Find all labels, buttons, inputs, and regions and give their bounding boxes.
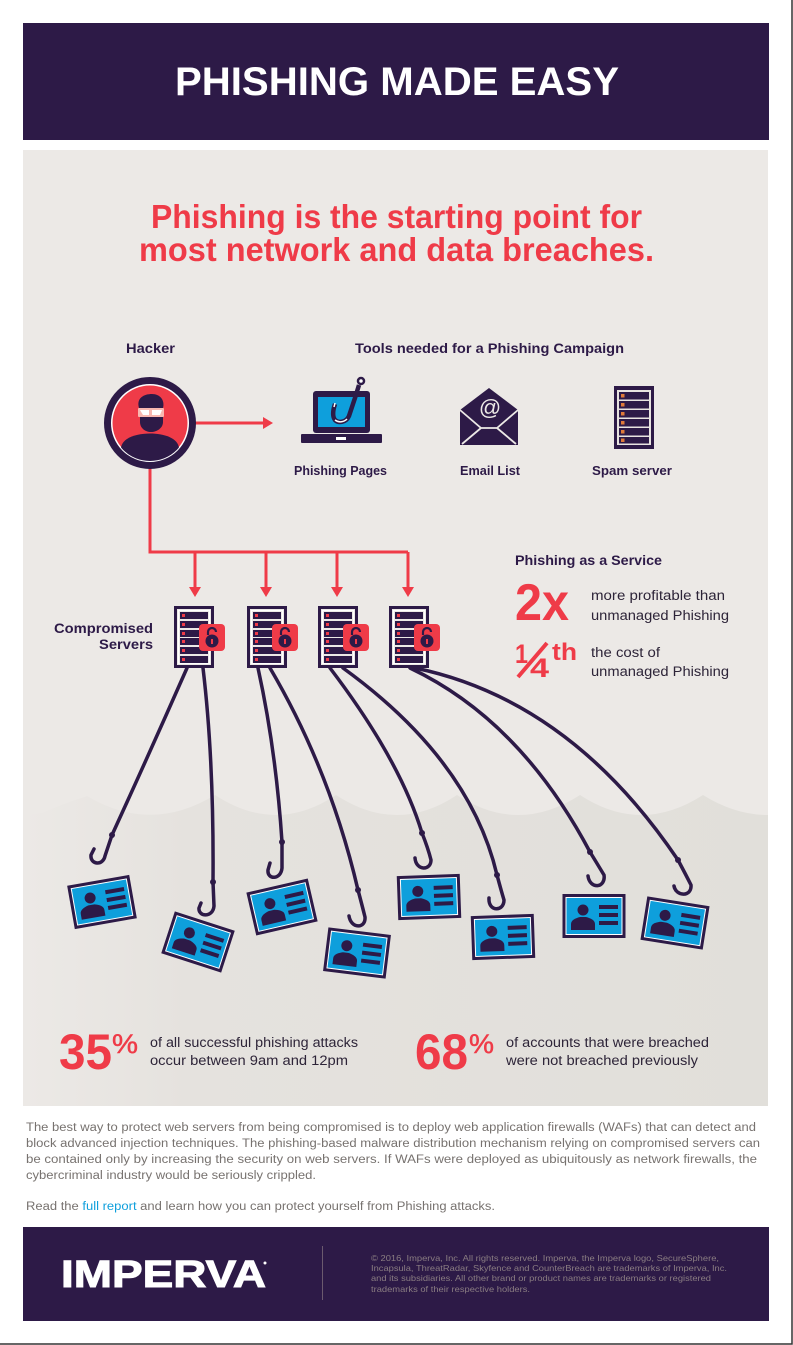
stat: quarter cost: 1 <box>515 639 528 669</box>
arrowheads <box>189 417 414 597</box>
headline: Phishing is the starting point for <box>151 198 642 235</box>
stat: 35 percent: of all successful phishing attacks <box>150 1035 358 1050</box>
icon: hacker <box>108 380 192 466</box>
legal text: Incapsula, ThreatRadar, Skyfence and CounterBreach are trademarks of Imperva, Inc. <box>371 1263 727 1273</box>
stat: 2x: unmanaged Phishing <box>591 608 729 623</box>
label: spam server: Spam server <box>592 464 672 478</box>
label: compromised servers: Compromised <box>54 621 153 636</box>
stat: 2x: 2x <box>515 574 569 632</box>
stat: quarter cost <box>515 639 729 683</box>
body paragraph <box>26 1122 760 1182</box>
main panel background <box>23 150 768 1106</box>
footer divider <box>322 1246 323 1300</box>
phishing as a service heading: Phishing as a Service <box>515 553 663 568</box>
stat: quarter cost: 4 <box>530 653 549 683</box>
legal text: and its subsidiaries. All other brand or product names are trademarks or registered <box>371 1273 711 1283</box>
footer banner <box>23 1227 769 1321</box>
hook knots <box>109 830 681 893</box>
headline: most network and data breaches. <box>139 231 654 268</box>
stat: quarter cost: unmanaged Phishing <box>591 664 729 679</box>
stat: 68 percent: of accounts that were breached <box>506 1035 709 1050</box>
icon: spam server <box>614 386 654 449</box>
red connector lines from hacker to servers <box>150 423 408 587</box>
legal text <box>371 1253 727 1294</box>
stat: 2x <box>515 574 729 632</box>
stat: 68 percent <box>415 1024 709 1080</box>
icon: laptop with hook <box>301 378 382 443</box>
label: compromised servers <box>54 621 153 652</box>
body paragraph: be contained only by increasing the security on web servers. If WAFs were deployed as ubiquitously as network firewalls, the <box>26 1154 757 1166</box>
stat: 35 percent: occur between 9am and 12pm <box>150 1053 348 1068</box>
fishing lines and hooks <box>91 668 691 926</box>
headline <box>139 198 654 268</box>
logo: IMPERVA <box>61 1254 266 1296</box>
stat: 35 percent: % <box>112 1029 138 1059</box>
compromised server icons <box>176 608 440 666</box>
water waves <box>23 795 768 1106</box>
label: tools heading: Tools needed for a Phishing Campaign <box>355 341 624 356</box>
stat: 68 percent: % <box>469 1029 494 1059</box>
stat: 2x: more profitable than <box>591 588 725 603</box>
icon: envelope: @ <box>479 395 501 420</box>
title: PHISHING MADE EASY <box>175 60 619 104</box>
label: compromised servers: Servers <box>99 637 153 652</box>
label: phishing pages: Phishing Pages <box>294 464 387 478</box>
stolen identity cards <box>69 875 708 977</box>
call to action line: Read the full report and learn how you can protect yourself from Phishing attacks. <box>26 1201 495 1213</box>
header banner <box>23 23 769 140</box>
body paragraph: cybercriminal industry would be seriously crippled. <box>26 1170 316 1182</box>
legal text: trademarks of their respective holders. <box>371 1284 530 1294</box>
stat: 68 percent: were not breached previously <box>505 1053 698 1068</box>
legal text: © 2016, Imperva, Inc. All rights reserved. Imperva, the Imperva logo, SecureSphere, <box>371 1253 719 1263</box>
stat: quarter cost: th <box>552 639 577 666</box>
body paragraph: The best way to protect web servers from being compromised is to deploy web application firewalls (WAFs) that can detect and <box>26 1122 756 1134</box>
stat: 35 percent: 35 <box>59 1024 112 1080</box>
label: hacker: Hacker <box>126 341 176 356</box>
stat: 68 percent: 68 <box>415 1024 468 1080</box>
label: email list: Email List <box>460 464 521 478</box>
stat: quarter cost: the cost of <box>591 645 660 660</box>
stat: 35 percent <box>59 1024 358 1080</box>
icon: envelope <box>460 388 518 445</box>
body paragraph: block advanced injection techniques. The phishing-based malware distribution mechanism relying on compromised servers can <box>26 1138 760 1150</box>
